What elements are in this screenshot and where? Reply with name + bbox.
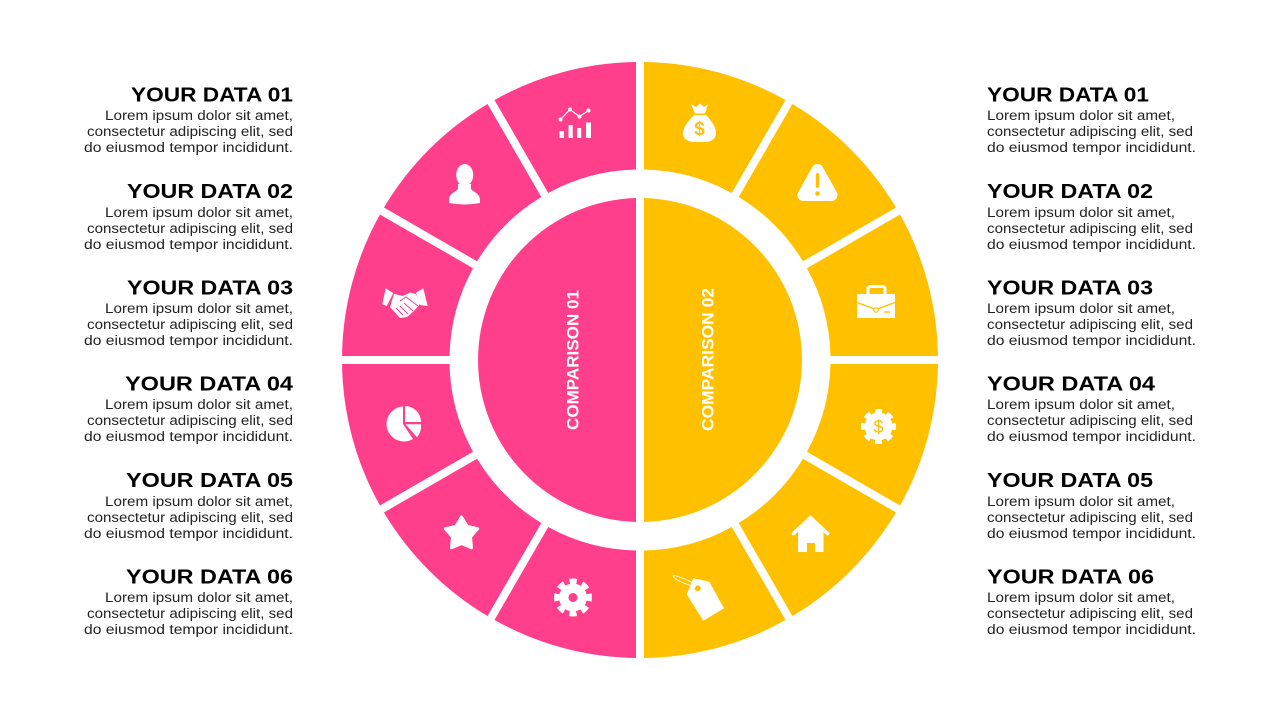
text block: left data 05	[84, 469, 293, 541]
text block: left data 01	[84, 84, 293, 155]
text block: right data 04: YOUR DATA 04	[987, 372, 1156, 396]
yellow segment 06	[644, 527, 786, 658]
text block: right data 02: Lorem ipsum dolor sit amet,	[987, 205, 1175, 220]
icon: price tag	[673, 575, 724, 621]
text block: left data 01: do eiusmod tempor incididunt.	[84, 140, 293, 155]
yellow segment 05	[739, 459, 896, 616]
icon: line and bar chart	[558, 108, 591, 138]
yellow segment 03	[807, 214, 938, 356]
text block: left data 03: consectetur adipiscing elit, sed	[87, 317, 293, 332]
text block: right data 01: do eiusmod tempor incididunt.	[987, 140, 1196, 155]
panel: yellow wheel half	[644, 62, 938, 658]
icon: person	[449, 164, 480, 204]
text block: right data 06: consectetur adipiscing elit, sed	[987, 606, 1193, 621]
text block: right data 02: do eiusmod tempor incididunt.	[987, 237, 1196, 252]
text block: right data 06: do eiusmod tempor incididunt.	[987, 622, 1196, 637]
text block: right data 03: do eiusmod tempor incididunt.	[987, 333, 1196, 348]
text block: left data 04: YOUR DATA 04	[125, 372, 294, 396]
text block: right data 05: YOUR DATA 05	[987, 469, 1153, 492]
panel: right text column	[987, 84, 1196, 637]
pink segment 05	[384, 459, 541, 616]
icon: house	[794, 518, 828, 552]
yellow segment 02	[739, 104, 896, 261]
icon: star	[445, 517, 478, 548]
text block: right data 06: Lorem ipsum dolor sit amet,	[987, 590, 1175, 605]
pink segment 02	[384, 104, 541, 261]
text block: left data 04: consectetur adipiscing elit, sed	[87, 413, 293, 428]
text block: left data 02	[84, 180, 293, 252]
label: comparison 01: COMPARISON 01	[564, 290, 582, 430]
icon: dollar gear: $	[873, 417, 884, 437]
text block: left data 01: YOUR DATA 01	[131, 84, 293, 106]
panel: left text column	[84, 84, 294, 637]
icon: warning triangle	[804, 170, 832, 196]
text block: left data 03: do eiusmod tempor incididunt.	[84, 333, 293, 348]
icon: gear	[554, 578, 592, 617]
text block: right data 05	[987, 469, 1196, 541]
text block: left data 02: YOUR DATA 02	[127, 180, 293, 203]
text block: left data 06: Lorem ipsum dolor sit amet,	[105, 590, 293, 605]
text block: right data 01: Lorem ipsum dolor sit amet,	[987, 108, 1175, 123]
text block: left data 05: do eiusmod tempor incididunt.	[84, 526, 293, 541]
text block: right data 04: consectetur adipiscing elit, sed	[987, 413, 1193, 428]
text block: left data 02: Lorem ipsum dolor sit amet,	[105, 205, 293, 220]
text block: left data 04: Lorem ipsum dolor sit amet,	[105, 397, 293, 412]
text block: left data 05: YOUR DATA 05	[126, 469, 293, 492]
label: comparison 02: COMPARISON 02	[700, 288, 718, 431]
text block: left data 01: Lorem ipsum dolor sit amet,	[105, 108, 293, 123]
text block: left data 02: do eiusmod tempor incididunt.	[84, 237, 293, 252]
text block: right data 01: consectetur adipiscing elit, sed	[987, 124, 1193, 139]
icon: dollar gear	[861, 409, 896, 444]
text block: right data 04: Lorem ipsum dolor sit amet,	[987, 397, 1175, 412]
text block: right data 04: do eiusmod tempor incididunt.	[987, 429, 1196, 444]
text block: left data 03: YOUR DATA 03	[127, 276, 293, 300]
text block: left data 05: consectetur adipiscing elit, sed	[87, 510, 293, 525]
text block: right data 05: consectetur adipiscing elit, sed	[987, 510, 1193, 525]
pink segment 03	[342, 214, 473, 356]
text block: left data 03	[84, 276, 293, 348]
text block: right data 05: do eiusmod tempor incididunt.	[987, 526, 1196, 541]
icon: money bag	[683, 104, 716, 142]
text block: right data 02: YOUR DATA 02	[987, 180, 1153, 203]
text block: right data 03: consectetur adipiscing elit, sed	[987, 317, 1193, 332]
icon: handshake	[382, 288, 428, 318]
text block: right data 02: consectetur adipiscing elit, sed	[987, 221, 1193, 236]
text block: right data 01	[987, 84, 1196, 155]
text block: right data 03	[987, 276, 1196, 348]
text block: right data 02	[987, 180, 1196, 252]
text block: right data 04	[987, 372, 1196, 444]
icon: briefcase	[857, 286, 895, 318]
icon: money bag: $	[694, 119, 705, 140]
icon: pie chart	[387, 406, 421, 441]
text block: left data 02: consectetur adipiscing elit, sed	[87, 221, 293, 236]
text block: left data 06: do eiusmod tempor incididunt.	[84, 622, 293, 637]
panel: pink wheel half	[342, 62, 636, 658]
yellow inner half circle	[644, 198, 802, 522]
text block: right data 06: YOUR DATA 06	[987, 566, 1154, 588]
text block: left data 04: do eiusmod tempor incididunt.	[84, 429, 293, 444]
text block: left data 06	[84, 566, 293, 637]
text block: left data 03: Lorem ipsum dolor sit amet,	[105, 301, 293, 316]
pink inner half circle	[478, 198, 636, 522]
pink segment 06	[494, 527, 636, 658]
pink segment 04	[342, 364, 473, 506]
text block: right data 05: Lorem ipsum dolor sit amet,	[987, 494, 1175, 509]
pink segment 01	[494, 62, 636, 193]
text block: left data 06: consectetur adipiscing elit, sed	[87, 606, 293, 621]
text block: left data 01: consectetur adipiscing elit, sed	[87, 124, 293, 139]
text block: left data 06: YOUR DATA 06	[126, 566, 293, 588]
text block: right data 03: Lorem ipsum dolor sit amet,	[987, 301, 1175, 316]
text block: left data 04	[84, 372, 294, 444]
yellow segment 01	[644, 62, 786, 193]
text block: right data 06	[987, 566, 1196, 637]
text block: left data 05: Lorem ipsum dolor sit amet,	[105, 494, 293, 509]
yellow segment 04	[807, 364, 938, 506]
text block: right data 01: YOUR DATA 01	[987, 84, 1149, 106]
text block: right data 03: YOUR DATA 03	[987, 276, 1153, 300]
